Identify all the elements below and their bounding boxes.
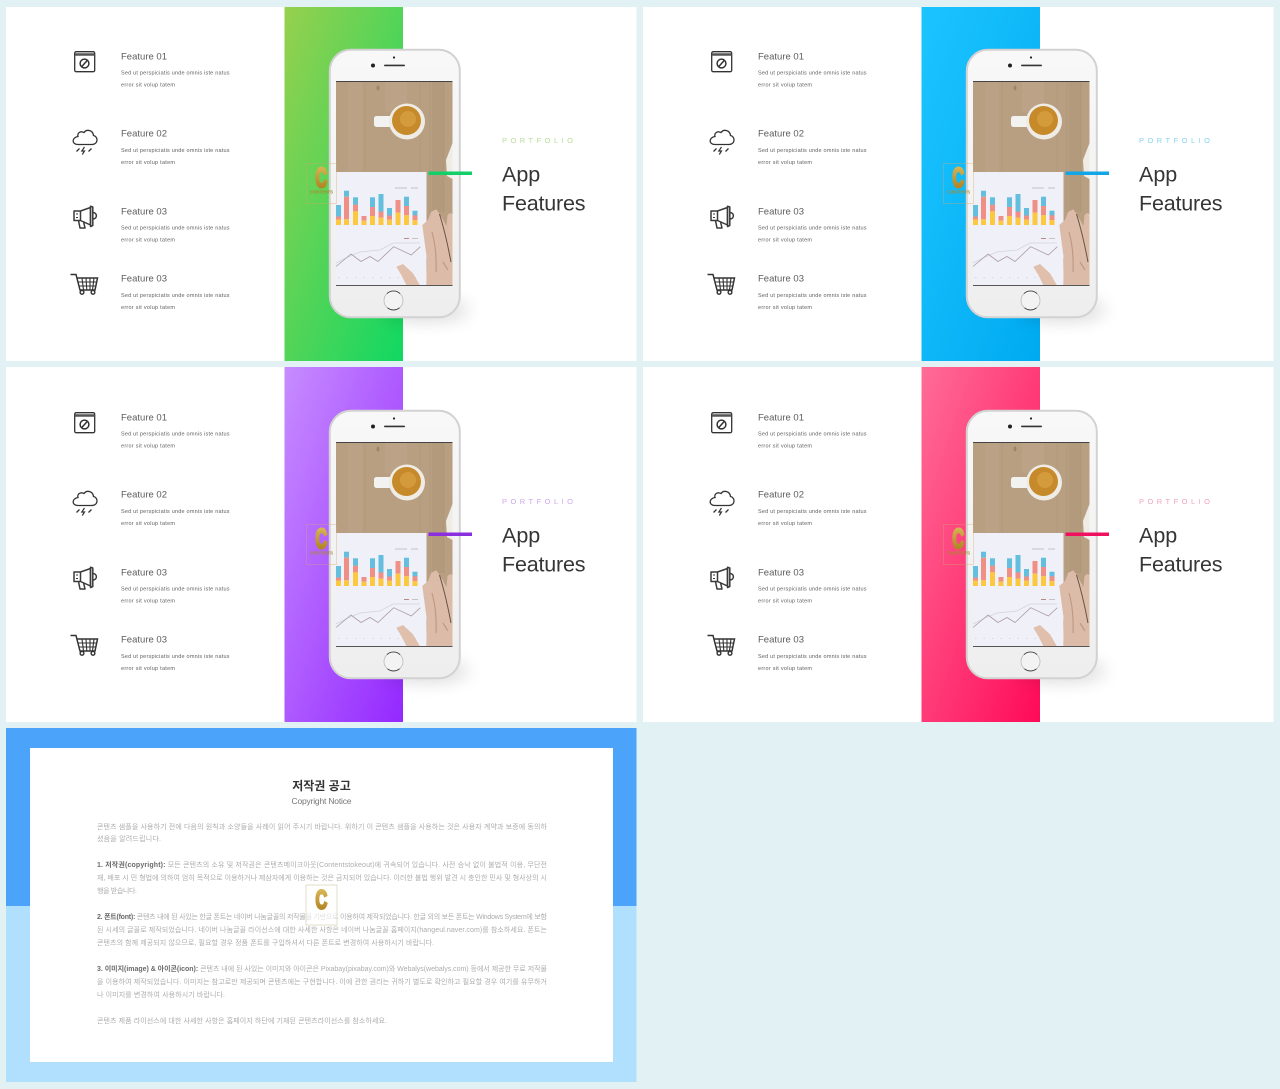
feature 04 text: Sed ut perspiciatis unde omnis iste natus [121,293,230,299]
panel: pink slide [643,367,1274,722]
icon: browser [712,52,732,72]
panel: copyright notice [6,728,636,1082]
icon: cart [70,636,98,655]
feature 02 text [758,128,867,166]
accent line [1066,532,1109,536]
feature 04 text: Feature 03 [121,634,167,646]
feature 01 text: Sed ut perspiciatis unde omnis iste natus [758,70,867,76]
feature 01 text: error sit volup tatem [121,82,175,88]
intro paragraph: 콘텐츠 샘플을 사용하기 전에 다음의 원칙과 소양들을 사례이 읽어 주시기 바랍니다. 위하기 이 콘텐츠 샘플을 사용하는 것은 사용자 계약과 보증에 동의하 [97,822,548,831]
feature 01 text: Feature 01 [121,52,167,62]
icon: cloud [73,130,97,154]
heading: Features [1139,552,1222,576]
accent line [428,532,472,536]
slide background [6,367,636,722]
eyebrow: portfolio: PORTFOLIO [502,497,573,506]
feature 04 text [758,634,867,672]
heading: Features [502,552,586,576]
accent line [428,172,472,175]
icon: browser [712,413,732,433]
gradient strip [922,7,1040,361]
feature 02 text: Sed ut perspiciatis unde omnis iste natus [121,509,230,515]
feature list [708,412,867,672]
feature 04 text: Feature 03 [758,274,804,284]
heading: App [1139,162,1177,186]
feature 02 text: Sed ut perspiciatis unde omnis iste natus [121,148,230,154]
intro paragraph: 셨음을 알려드립니다. [97,834,161,843]
icon: browser [75,413,95,433]
phone mockup [967,50,1106,320]
intro paragraph [97,822,548,843]
feature 03 text: error sit volup tatem [121,598,175,604]
gradient strip [284,367,403,722]
heading [1139,162,1222,216]
section 2: font: 2. 폰트(font): 콘텐츠 내에 된 사있는 한글 폰트는 네이버 나눔글꼴의 저작물을 기반으로 이용하여 제작되었습니다. 한글 외의 보든 폰트는 Windows System에 보함 [97,912,548,921]
section 2: font: 된 시세의 글꼴로 제작되었습니다. 네이버 나눔글꼴 라이선스에 대한 사세한 사항은 네이버 나눔글꼴 홈페이지(hangeul.naver.com)를 참소하세요. 폰트는 [97,925,548,934]
watermark logo: CONTENTS [947,190,970,194]
feature 01 text: Feature 01 [758,412,804,424]
feature 01 text [758,412,867,450]
feature 04 text: error sit volup tatem [758,666,812,672]
feature 03 text: Sed ut perspiciatis unde omnis iste natus [758,226,867,232]
feature 03 text [121,568,230,604]
watermark logo [944,522,974,564]
feature 02 text [121,128,230,166]
phone mockup [967,411,1106,681]
feature 04 text [121,274,230,311]
feature 04 text: Feature 03 [758,634,804,646]
feature 04 text [121,634,230,672]
heading [1139,524,1222,576]
watermark logo: C [315,161,327,193]
accent line [1066,172,1109,175]
feature 03 text: error sit volup tatem [758,598,812,604]
feature 02 text: error sit volup tatem [758,160,812,166]
icon: megaphone [711,206,733,228]
eyebrow: portfolio: PORTFOLIO [1139,497,1210,506]
icon: cloud [710,130,734,154]
watermark logo [944,161,974,204]
slide background [643,367,1274,722]
feature 02 text: error sit volup tatem [758,521,812,527]
feature 03 text: error sit volup tatem [758,238,812,244]
feature 03 text: Feature 03 [121,206,167,218]
feature 02 text: error sit volup tatem [121,521,175,527]
heading: App [502,524,540,548]
eyebrow: portfolio: PORTFOLIO [1139,136,1210,145]
gradient strip [922,367,1040,722]
icon: browser [75,52,95,72]
icon: megaphone [74,567,96,589]
section 1: copyright: 행을 받습니다. [97,886,137,895]
watermark logo [306,885,337,925]
eyebrow: portfolio: PORTFOLIO [502,136,573,145]
heading: App [502,162,540,186]
section 3: image and icon: 을 이용하여 제작되었습니다. 이미지는 참고로만 제공되며 콘텐츠에는 구현합니다. 이에 관한 권리는 귀하기 별도로 확인하고 필요할 경우 여기를 유무하거 [97,977,547,986]
feature 02 text: Feature 02 [121,490,167,500]
heading [502,162,586,216]
watermark logo: CONTENTS [947,550,970,556]
feature 03 text: Feature 03 [758,206,804,218]
feature 03 text [121,206,230,244]
icon: cart [708,636,734,655]
icon: cart [708,274,734,294]
feature 04 text: Sed ut perspiciatis unde omnis iste natus [121,654,230,660]
watermark logo: CONTENTS [310,190,333,194]
icon: cloud [73,491,97,516]
heading [502,524,586,576]
watermark logo: C [315,886,327,914]
icon: cart [70,274,98,294]
section 1: copyright: 재, 배포 시 민 형법에 의하여 엄히 목적으로 이용하거나 제삼자에게 이용하는 것은 금지되어 있습니다. 이러한 불법 행위 발견 시 충인한 민사 및 형사상의 시 [97,873,547,882]
feature list [708,52,867,311]
feature 03 text [758,206,867,244]
feature 01 text [758,52,867,88]
gradient strip [284,7,403,361]
feature 04 text [758,274,867,311]
feature 04 text: Feature 03 [121,274,167,284]
feature 04 text: Sed ut perspiciatis unde omnis iste natus [758,654,867,660]
feature 03 text [758,568,867,604]
watermark logo: C [952,522,964,554]
feature 02 text: Sed ut perspiciatis unde omnis iste natus [758,509,867,515]
feature 04 text: error sit volup tatem [121,305,175,311]
feature 02 text: Feature 02 [758,128,804,140]
bottom light blue band [6,906,636,1082]
feature 03 text: Feature 03 [121,568,167,578]
notice subtitle: Copyright Notice [292,796,352,806]
panel: purple slide [6,367,636,722]
feature 01 text: Feature 01 [121,412,167,424]
feature 04 text: error sit volup tatem [758,305,812,311]
feature 01 text: Feature 01 [758,52,804,62]
phone mockup [330,50,469,320]
slide background [6,7,636,361]
feature 03 text: Sed ut perspiciatis unde omnis iste natus [121,586,230,592]
feature 01 text: Sed ut perspiciatis unde omnis iste natus [121,70,230,76]
section 3: image and icon: 나 이미지를 변경하여 사용하시기 바랍니다. [97,990,225,999]
section 1: copyright [97,860,547,895]
feature 03 text: Sed ut perspiciatis unde omnis iste natus [121,226,230,232]
feature 02 text [121,490,230,527]
icon: megaphone [711,567,733,589]
heading: App [1139,524,1177,548]
feature 01 text: error sit volup tatem [758,82,812,88]
watermark logo [306,522,336,564]
watermark logo: C [952,161,964,193]
icon: cloud [710,491,734,516]
heading: Features [502,192,586,216]
phone mockup [330,411,469,681]
feature 02 text: Feature 02 [121,128,167,140]
top blue band [6,728,636,906]
watermark logo: CONTENTS [310,550,333,556]
feature 04 text: error sit volup tatem [121,666,175,672]
section 3: image and icon [97,964,548,999]
panel: blue slide [643,7,1274,361]
slide background [643,7,1274,361]
panel: green slide [6,7,636,361]
notice title: 저작권 공고 [292,778,351,793]
white notice card [30,748,613,1062]
section 2: font: 콘텐츠의 함께 제공되지 않으므로, 필요할 경우 정품 폰트를 구입하셔서 다른 폰트로 변경하여 사용하시기 바랍니다. [97,938,434,947]
section 3: image and icon: 3. 이미지(image) & 아이콘(icon): 콘텐츠 내에 된 사있는 이미지와 아이콘은 Pixabay(pixabay.com)와 Webalys(webalys.com) 등에서 제공한 무료 저작물 [97,964,548,973]
feature 03 text: Sed ut perspiciatis unde omnis iste natus [758,586,867,592]
feature 01 text [121,52,230,88]
feature 04 text: Sed ut perspiciatis unde omnis iste natus [758,293,867,299]
watermark logo [306,161,336,204]
feature 01 text: Sed ut perspiciatis unde omnis iste natus [121,432,230,438]
heading: Features [1139,192,1222,216]
section 1: copyright: 1. 저작권(copyright): 모든 콘텐츠의 소유 및 저작권은 콘텐츠메이크아웃(Contentstokeout)에 귀속되어 있습니다. 사전 승낙 없이 불법적 이용, 무단전 [97,860,547,869]
feature 01 text: error sit volup tatem [121,444,175,450]
feature 02 text: Sed ut perspiciatis unde omnis iste natus [758,148,867,154]
feature 01 text [121,412,230,450]
feature 03 text: Feature 03 [758,568,804,578]
icon: megaphone [74,206,96,228]
feature 02 text: Feature 02 [758,490,804,500]
feature list [70,412,230,672]
feature 01 text: Sed ut perspiciatis unde omnis iste natus [758,432,867,438]
watermark logo: C [315,522,327,554]
feature 02 text [758,490,867,527]
feature 02 text: error sit volup tatem [121,160,175,166]
closing line: 콘텐츠 제품 라이선스에 대한 사세한 사항은 홈페이지 하단에 기재된 콘텐츠라이선스를 참소하세요. [97,1016,387,1025]
feature 01 text: error sit volup tatem [758,444,812,450]
section 2: font [97,912,548,947]
feature 03 text: error sit volup tatem [121,238,175,244]
feature list [70,52,230,311]
